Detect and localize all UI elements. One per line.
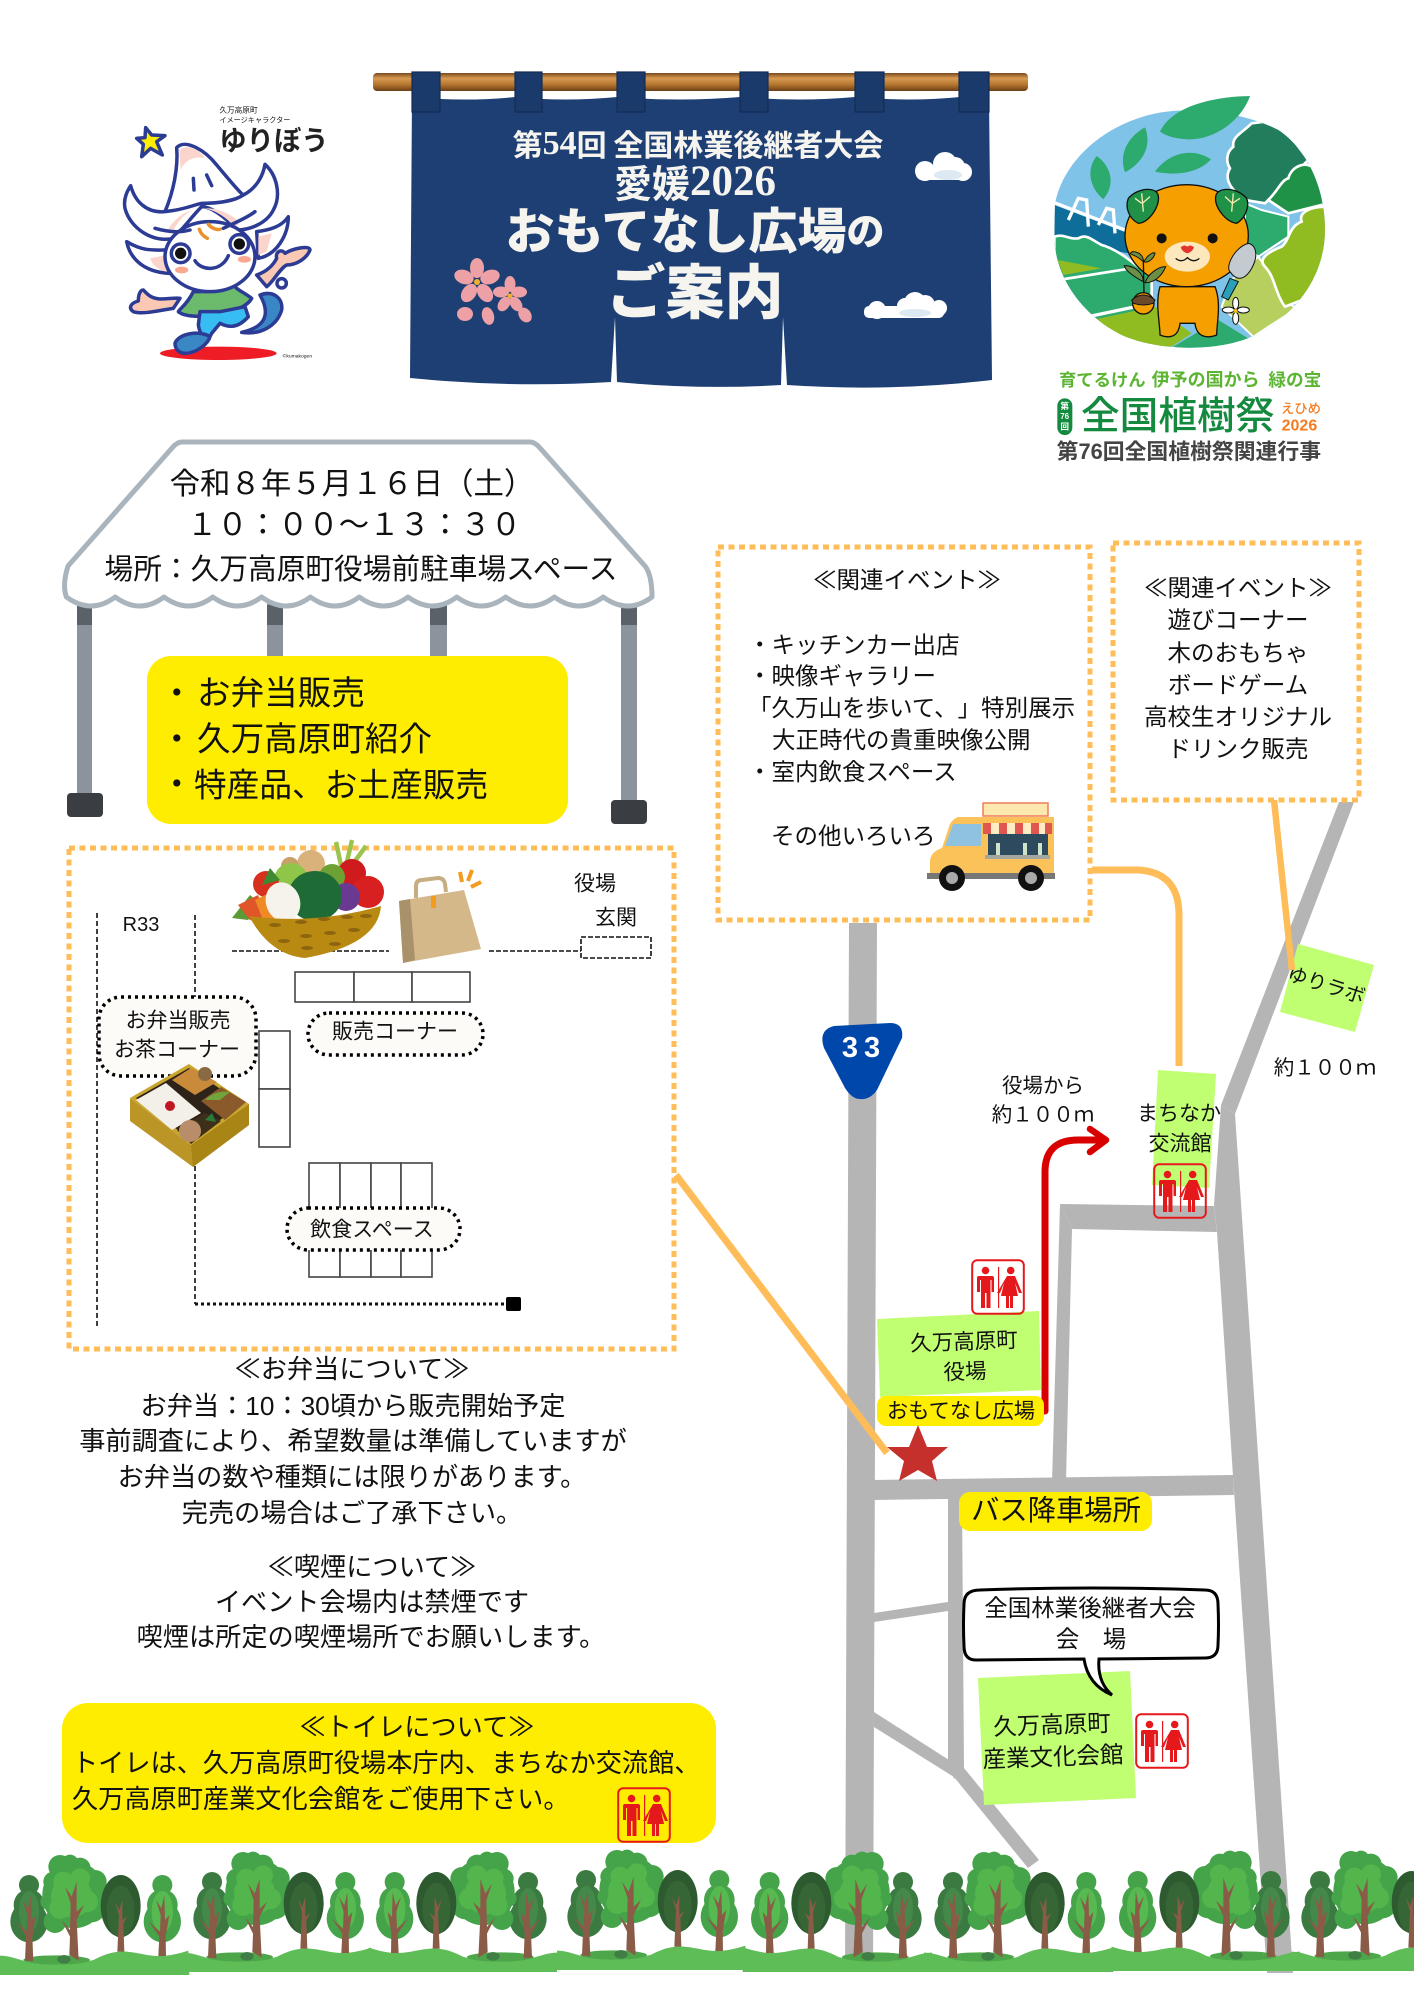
date and place text: １０：００～１３：３０	[187, 508, 521, 542]
yellow box: what is on sale: 特産品、お土産販売	[194, 766, 488, 804]
logo text: 2026	[1282, 417, 1317, 434]
event list text: ・室内飲食スペース	[748, 759, 957, 785]
date and place text	[105, 467, 617, 586]
banner title: 愛媛2026	[614, 154, 776, 208]
icon: bento box	[130, 1064, 249, 1167]
distance label: from town hall: 約１００ｍ	[992, 1104, 1094, 1126]
panel: related events 2: ドリンク販売	[1168, 736, 1308, 762]
logo text: 伊予の国から	[1152, 370, 1260, 390]
curtain rod	[373, 73, 1028, 91]
panel: venue layout plan	[69, 840, 674, 1349]
date and place text: 令和８年５月１６日（土）	[170, 467, 534, 501]
yellow box: what is on sale: ・	[160, 722, 194, 758]
mascot caption: イメージキャラクター	[219, 116, 290, 125]
banner title: ご案内	[606, 246, 784, 330]
text block: about bento: ≪お弁当について≫	[235, 1354, 469, 1384]
red route arrow	[1045, 1129, 1106, 1411]
building: industrial culture hall	[978, 1671, 1136, 1805]
logo text: えひめ	[1281, 401, 1321, 416]
speech bubble: conference venue: 全国林業後継者大会	[984, 1595, 1196, 1621]
logo text: 第	[1060, 400, 1069, 411]
label: R33: R33	[123, 914, 159, 936]
label: sales corner	[308, 1013, 483, 1055]
banner title: 第54回 全国林業後継者大会	[513, 121, 883, 165]
speech bubble: conference venue: 会 場	[1056, 1626, 1126, 1652]
tent canopy	[65, 442, 652, 606]
panel: related events 2: ボードゲーム	[1168, 672, 1308, 698]
tent posts	[67, 600, 647, 824]
connector: event box 2 to Yuri Lab	[1274, 800, 1292, 970]
label: bento and tea corner	[99, 997, 256, 1076]
toilet icon	[618, 1788, 670, 1842]
logo text: 回	[1060, 422, 1069, 432]
distance label: from town hall	[992, 1074, 1094, 1126]
logo text: 緑の宝	[1268, 370, 1321, 390]
yellow box: what is on sale: お弁当販売	[197, 674, 365, 712]
yellow box: about toilets: トイレは、久万高原町役場本庁内、まちなか交流館、	[72, 1748, 700, 1778]
mascot caption: ゆりぼう	[219, 125, 329, 156]
speech bubble: conference venue	[964, 1588, 1218, 1695]
label: bus drop-off: バス降車場所	[971, 1494, 1141, 1526]
distance label: Yuri Lab: 約１００ｍ	[1274, 1056, 1376, 1080]
label: bento and tea corner: お弁当販売	[126, 1010, 230, 1032]
clouds	[864, 152, 972, 319]
label: town hall entrance	[574, 872, 637, 930]
banner title: おもてなし広場の	[505, 192, 885, 264]
connector: event box 1 to Machinaka	[1092, 870, 1179, 1066]
toilet icon: town hall	[972, 1260, 1024, 1314]
mascot caption: ©kumakogen	[283, 353, 312, 360]
logo artwork	[1054, 96, 1325, 348]
yellow box: what is on sale: 久万高原町紹介	[197, 720, 432, 758]
map roads	[845, 802, 1354, 1973]
text block: about smoking: ≪喫煙について≫	[268, 1552, 476, 1582]
yellow box: what is on sale: ・	[160, 766, 194, 804]
road and boundary lines	[97, 913, 651, 1328]
distance label: from town hall: 役場から	[1002, 1074, 1084, 1098]
building: Kumakogen town hall: 役場	[943, 1359, 987, 1385]
label: town hall entrance: 役場	[574, 872, 616, 896]
mascot figure	[125, 128, 310, 360]
star: event location	[887, 1425, 948, 1481]
noren curtain banner	[373, 72, 1028, 388]
cherry blossoms	[452, 258, 535, 326]
logo text: 育てるけん	[1059, 370, 1146, 390]
sales tables	[295, 972, 470, 1002]
panel: related events 2: 木のおもちゃ	[1168, 640, 1308, 666]
curtain loops	[412, 72, 989, 112]
panel: related events 2: 高校生オリジナル	[1144, 704, 1332, 730]
building: Kumakogen town hall: 久万高原町	[910, 1328, 1018, 1356]
toilet icon: culture hall	[1136, 1714, 1188, 1768]
mascot caption: 久万高原町	[219, 104, 258, 114]
yellow box: what is on sale	[147, 656, 568, 824]
building: Machinaka exchange hall	[1137, 1070, 1221, 1188]
festival logo	[1045, 90, 1338, 464]
label: dining space: 飲食スペース	[310, 1218, 434, 1242]
event list text: ・映像ギャラリー	[748, 663, 936, 689]
panel: related events 2	[1113, 543, 1359, 800]
yellow box: about toilets: 久万高原町産業文化会館をご使用下さい。	[72, 1784, 570, 1814]
building: Kumakogen town hall	[877, 1311, 1041, 1397]
yellow box: about toilets: ≪トイレについて≫	[300, 1712, 534, 1742]
side tables	[259, 1031, 290, 1147]
label: bento and tea corner: お茶コーナー	[114, 1038, 240, 1062]
building: Machinaka exchange hall: まちなか	[1137, 1102, 1221, 1126]
text block: about bento	[79, 1354, 627, 1528]
building: Yuri Lab: ゆりラボ	[1285, 962, 1368, 1009]
logo text: 76	[1060, 412, 1070, 421]
text block: about bento: お弁当の数や種類には限りがあります。	[118, 1462, 586, 1492]
building: Yuri Lab	[1280, 944, 1374, 1032]
toilet icon: Machinaka	[1154, 1164, 1206, 1218]
panel: related events 2: 遊びコーナー	[1168, 607, 1308, 633]
text block: about bento: 事前調査により、希望数量は準備していますが	[79, 1426, 627, 1456]
text block: about bento: お弁当：10：30頃から販売開始予定	[141, 1391, 565, 1421]
logo text	[1057, 370, 1321, 464]
yellow box: what is on sale: ・	[160, 676, 194, 712]
label: dining space	[287, 1208, 460, 1250]
event list text: その他いろいろ	[771, 823, 936, 849]
building: industrial culture hall: 産業文化会館	[982, 1742, 1124, 1772]
panel: related events 2: ≪関連イベント≫	[1144, 575, 1332, 601]
date and place text: 場所：久万高原町役場前駐車場スペース	[105, 554, 617, 586]
tree band	[0, 1850, 1414, 1975]
event list text: 大正時代の貴重映像公開	[772, 727, 1030, 753]
mascot: Yuribou	[125, 104, 329, 360]
logo text: 第76回全国植樹祭関連行事	[1057, 439, 1321, 464]
text block: about bento: 完売の場合はご了承下さい。	[182, 1498, 522, 1528]
event list text: ≪関連イベント≫	[813, 567, 1001, 593]
tent with date and place	[65, 442, 652, 824]
label: town hall entrance: 玄関	[595, 906, 637, 930]
text block: about smoking: イベント会場内は禁煙です	[215, 1587, 529, 1617]
banner title	[505, 121, 885, 330]
mascot caption	[219, 104, 329, 360]
event list text: 「久万山を歩いて、」特別展示	[748, 695, 1075, 721]
yellow box: about toilets	[62, 1703, 716, 1843]
icon: kitchen car	[927, 803, 1055, 891]
route 33 badge	[822, 1023, 902, 1099]
dining tables	[309, 1163, 432, 1277]
icon: vegetable basket	[232, 840, 384, 958]
curtain cloth	[410, 97, 992, 388]
event list text: ・キッチンカー出店	[748, 632, 960, 658]
building: industrial culture hall: 久万高原町	[993, 1710, 1111, 1740]
panel: related events 1	[718, 547, 1090, 920]
logo text: 全国植樹祭	[1081, 395, 1274, 438]
label: sales corner: 販売コーナー	[332, 1020, 458, 1044]
route 33 badge: 33	[842, 1032, 886, 1064]
end marker	[506, 1297, 521, 1311]
text block: about smoking: 喫煙は所定の喫煙場所でお願いします。	[137, 1622, 605, 1652]
icon: paper bag	[399, 870, 481, 963]
event list text	[748, 567, 1075, 849]
connector: layout plan to square	[676, 1175, 887, 1453]
text block: about smoking	[137, 1552, 605, 1652]
label: hospitality square: おもてなし広場	[887, 1399, 1035, 1423]
building: Machinaka exchange hall: 交流館	[1148, 1132, 1212, 1156]
